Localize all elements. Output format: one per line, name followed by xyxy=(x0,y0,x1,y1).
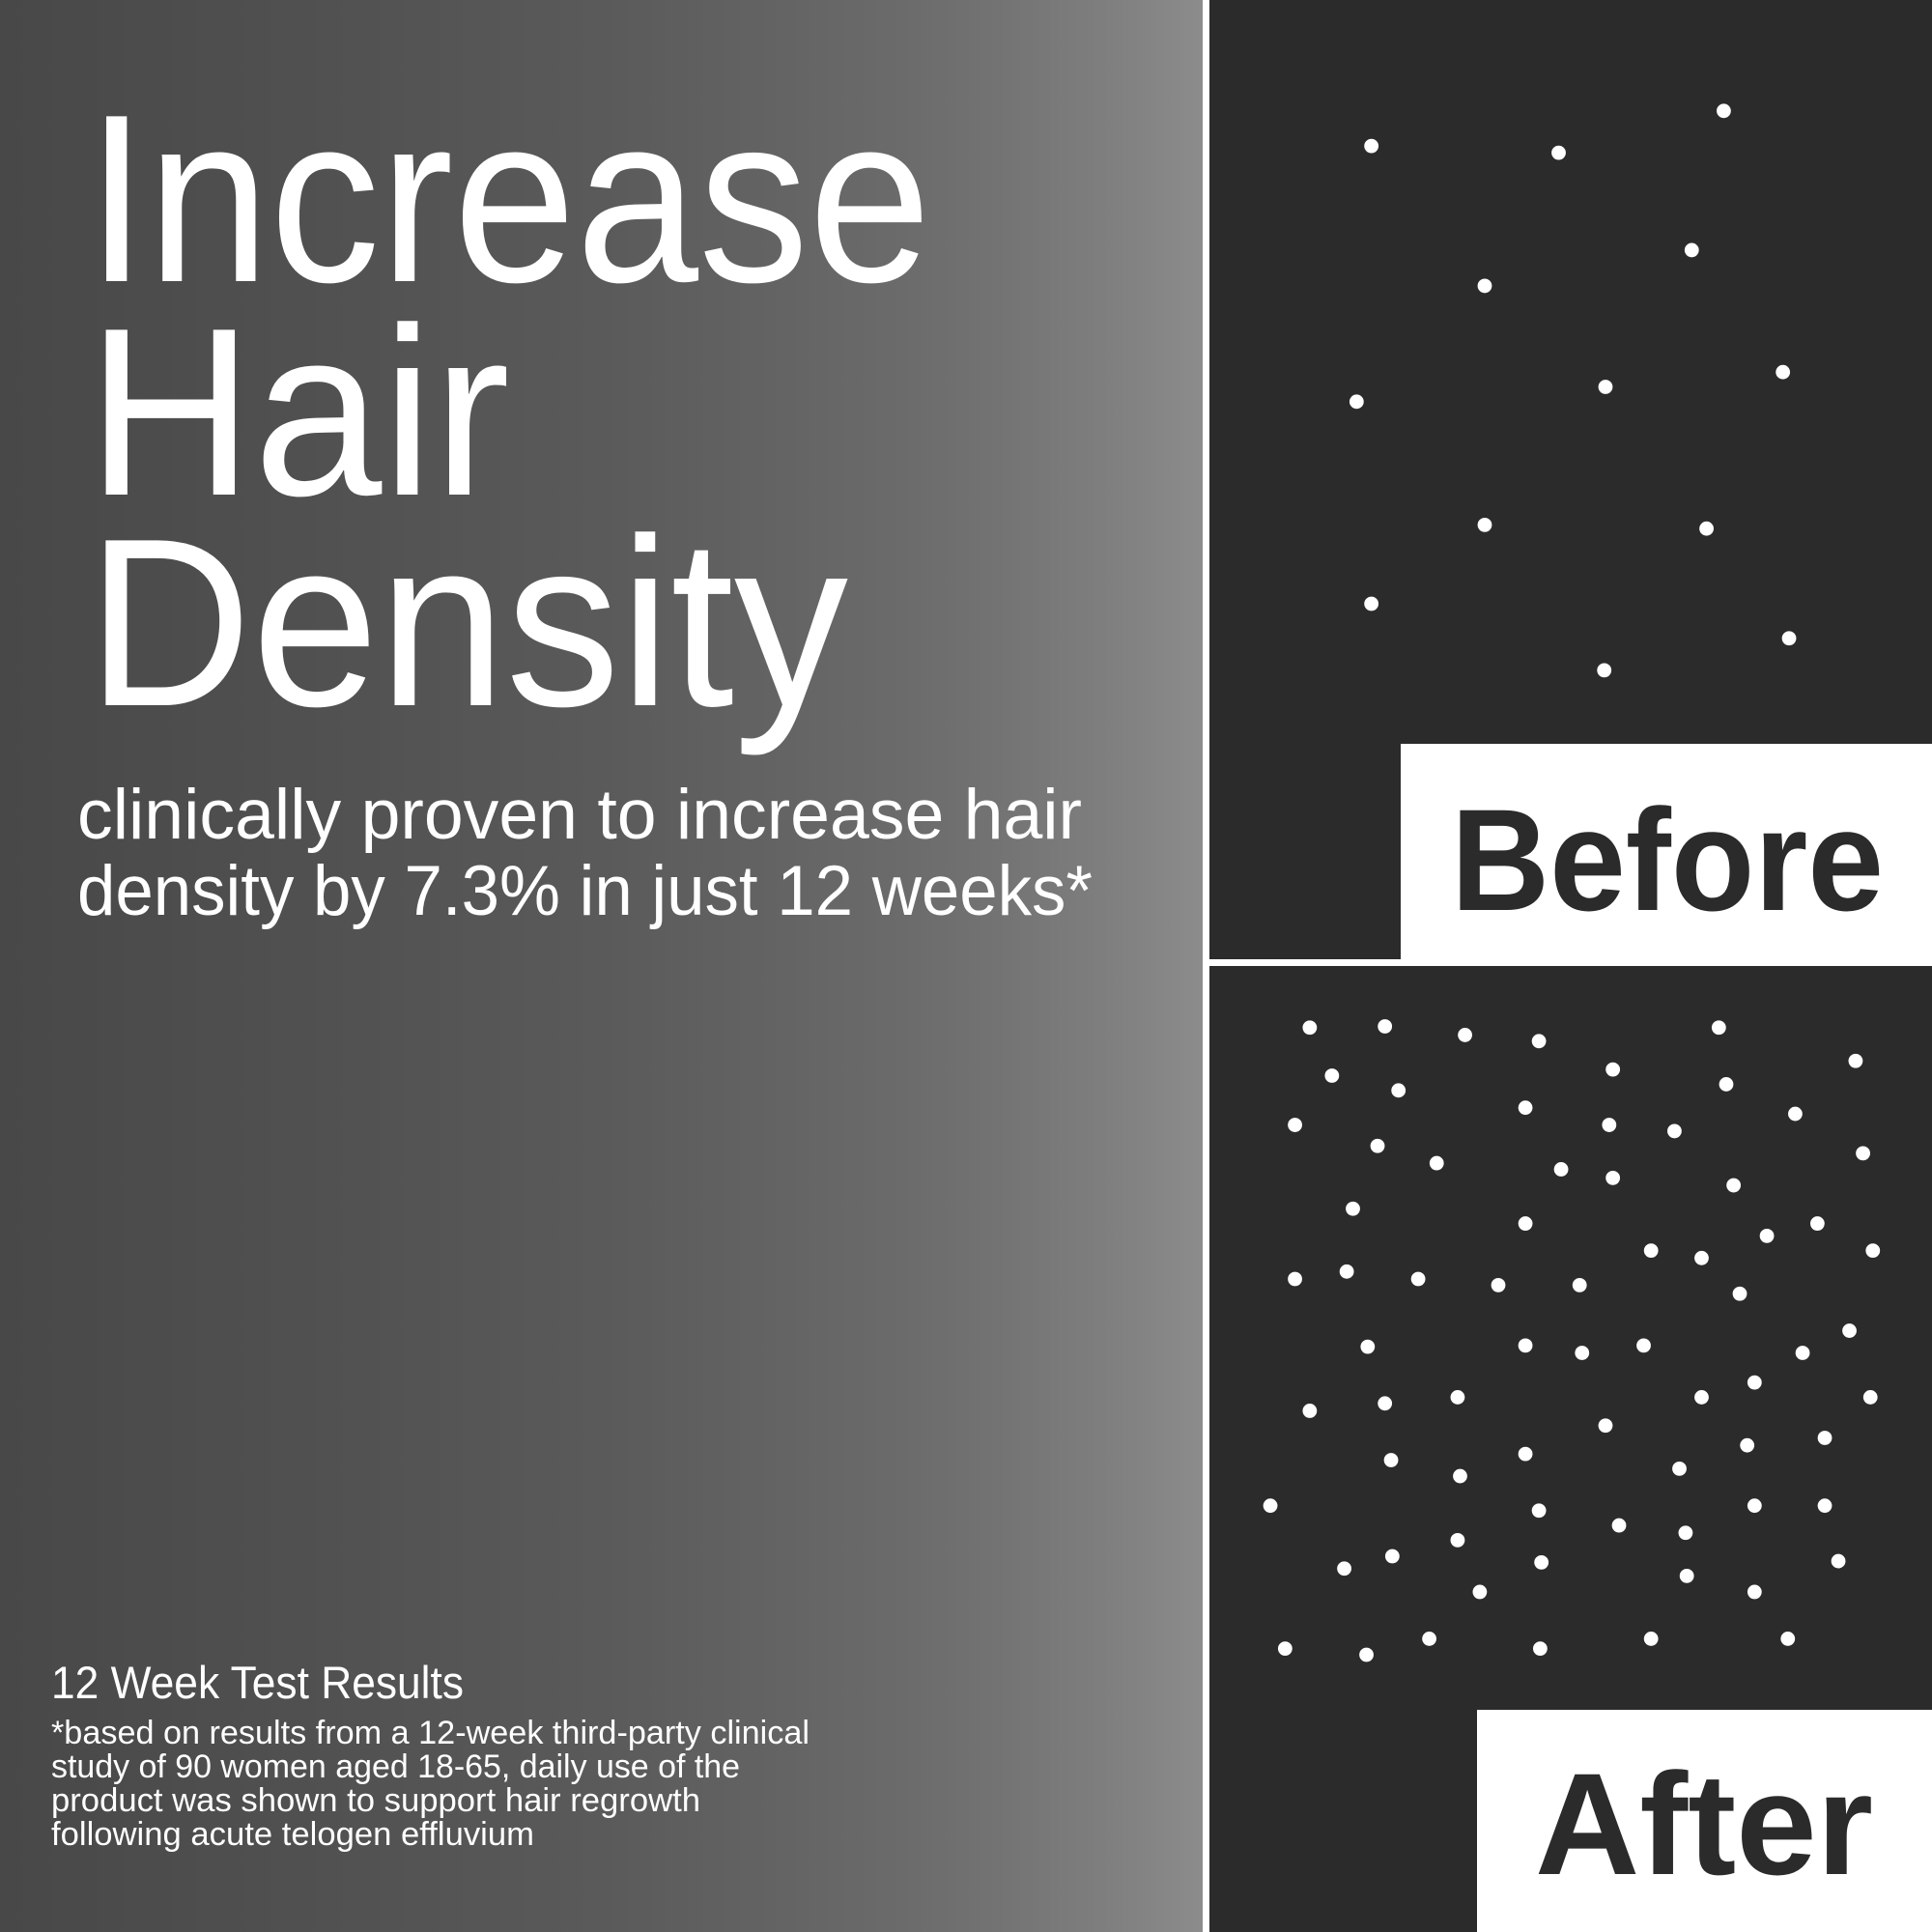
title xyxy=(86,64,931,756)
footnote: *based on results from a 12-week third-party clinical xyxy=(51,1715,810,1751)
footnote: study of 90 women aged 18-65, daily use of the xyxy=(51,1748,740,1785)
title: Increase xyxy=(86,64,931,332)
panel: before xyxy=(1209,0,1932,966)
dots: after xyxy=(1264,1019,1880,1662)
panel: after xyxy=(1209,966,1932,1932)
subtitle xyxy=(77,776,1093,930)
panel: gradient left with headline and notes xyxy=(0,0,1203,1932)
subtitle: clinically proven to increase hair xyxy=(77,776,1082,854)
subtitle: density by 7.3% in just 12 weeks* xyxy=(77,852,1093,930)
label: after: After xyxy=(1535,1743,1873,1905)
title: Hair xyxy=(87,277,510,546)
label: after xyxy=(1477,1710,1932,1932)
footnote xyxy=(51,1715,810,1853)
dots: before xyxy=(1350,103,1796,677)
label: before xyxy=(1401,744,1932,966)
title: Density xyxy=(87,488,848,756)
label: before: Before xyxy=(1451,779,1884,941)
footnote: following acute telogen effluvium xyxy=(51,1816,534,1853)
test results heading: 12 Week Test Results xyxy=(51,1657,464,1708)
footnote: product was shown to support hair regrowth xyxy=(51,1782,700,1819)
